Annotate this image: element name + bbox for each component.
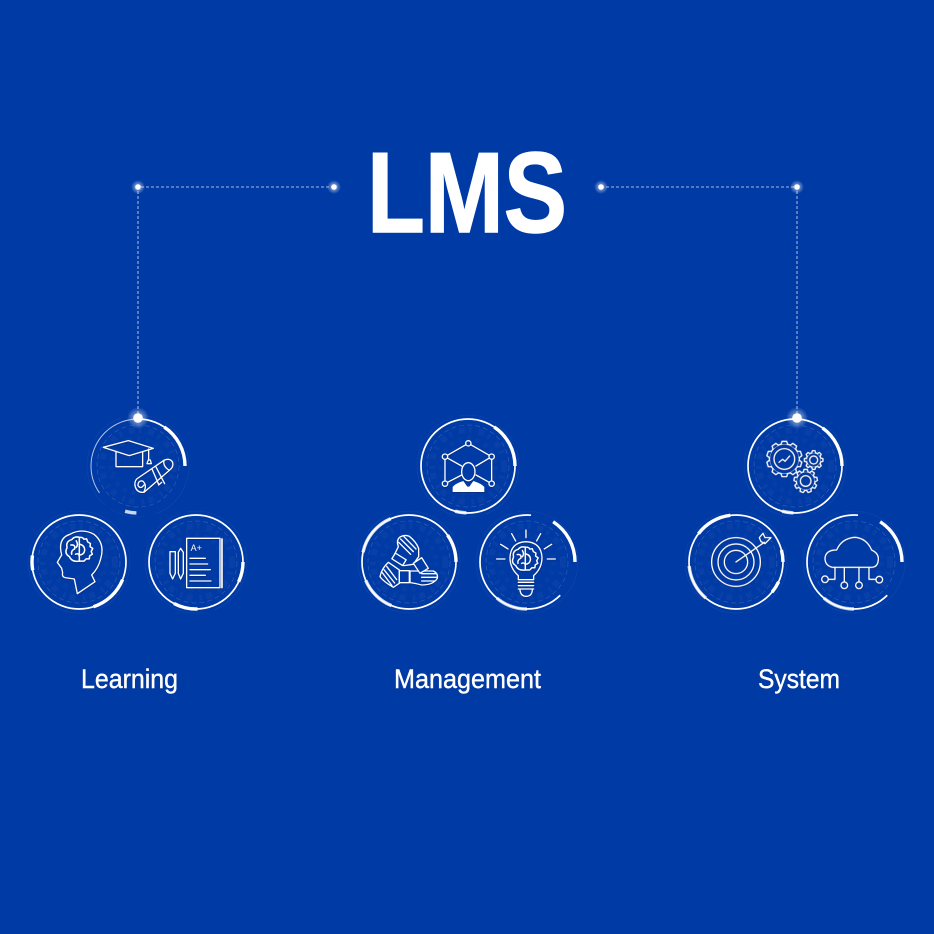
icon: light bulb with brain bbox=[497, 530, 555, 596]
icon: target and arrow bbox=[712, 533, 771, 586]
icons: Management bbox=[380, 441, 555, 596]
label: Learning: Learning bbox=[81, 664, 178, 694]
ring: cloud bbox=[803, 511, 905, 613]
icon: graded paper bbox=[187, 538, 222, 588]
icon: diploma bbox=[135, 459, 173, 492]
start node: System bbox=[786, 407, 808, 429]
group: Management icons bbox=[358, 415, 578, 613]
icon: gears bbox=[766, 441, 823, 493]
ring: head bbox=[28, 511, 130, 613]
ring: idea bulb bbox=[476, 511, 578, 613]
icon: graduation cap bbox=[103, 441, 153, 467]
label: Management: Management bbox=[394, 664, 541, 694]
ring: graduation bbox=[87, 415, 189, 517]
icon: person network bbox=[442, 441, 494, 492]
ring: target bbox=[685, 511, 787, 613]
ring: exam paper bbox=[145, 511, 247, 613]
title: LMS bbox=[367, 130, 567, 257]
connector: right dashed line to System bbox=[594, 180, 804, 418]
ring: gears bbox=[744, 415, 846, 517]
group: System icons bbox=[685, 407, 905, 613]
icon: cloud network bbox=[822, 537, 883, 589]
icons: Learning bbox=[57, 441, 222, 594]
connector: left dashed line to Learning bbox=[131, 180, 341, 418]
group: Learning icons bbox=[28, 407, 247, 613]
ring: network person bbox=[417, 415, 519, 517]
icon: graded paper: A+ bbox=[191, 543, 202, 553]
label: System: System bbox=[758, 664, 840, 694]
start node: Learning bbox=[127, 407, 149, 429]
icon: pencils bbox=[170, 548, 183, 579]
icon: head with brain bbox=[57, 531, 102, 594]
icon: joined hands bbox=[380, 535, 437, 587]
ring: teamwork bbox=[358, 511, 460, 613]
icons: System bbox=[712, 441, 883, 589]
